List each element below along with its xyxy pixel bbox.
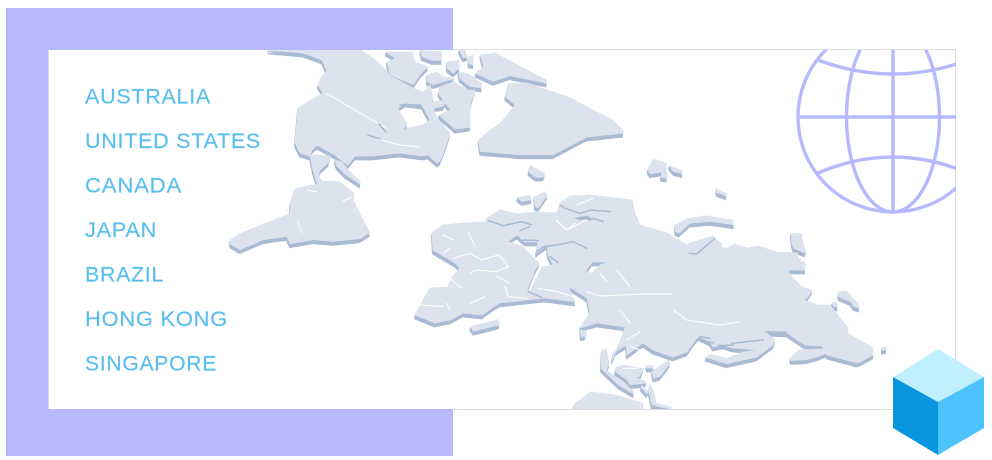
country: Canada: CANADA [85,174,182,198]
country: Hong Kong: HONG KONG [85,308,228,331]
americas and greenland [230,49,623,250]
icon: blue cube [893,349,984,455]
icon: globe [796,50,956,214]
country: Singapore: SINGAPORE [85,352,217,376]
white map panel [48,50,956,410]
country: United States: UNITED STATES [85,130,261,153]
lavender panel edge overlay [48,49,453,410]
world map [230,49,887,413]
country list [85,86,261,376]
country: Japan: JAPAN [85,219,157,242]
country: Australia: AUSTRALIA [85,86,211,108]
country: Brazil: BRAZIL [85,264,164,286]
lavender backing panel [6,8,453,456]
eurasia, africa and islands [415,158,887,413]
